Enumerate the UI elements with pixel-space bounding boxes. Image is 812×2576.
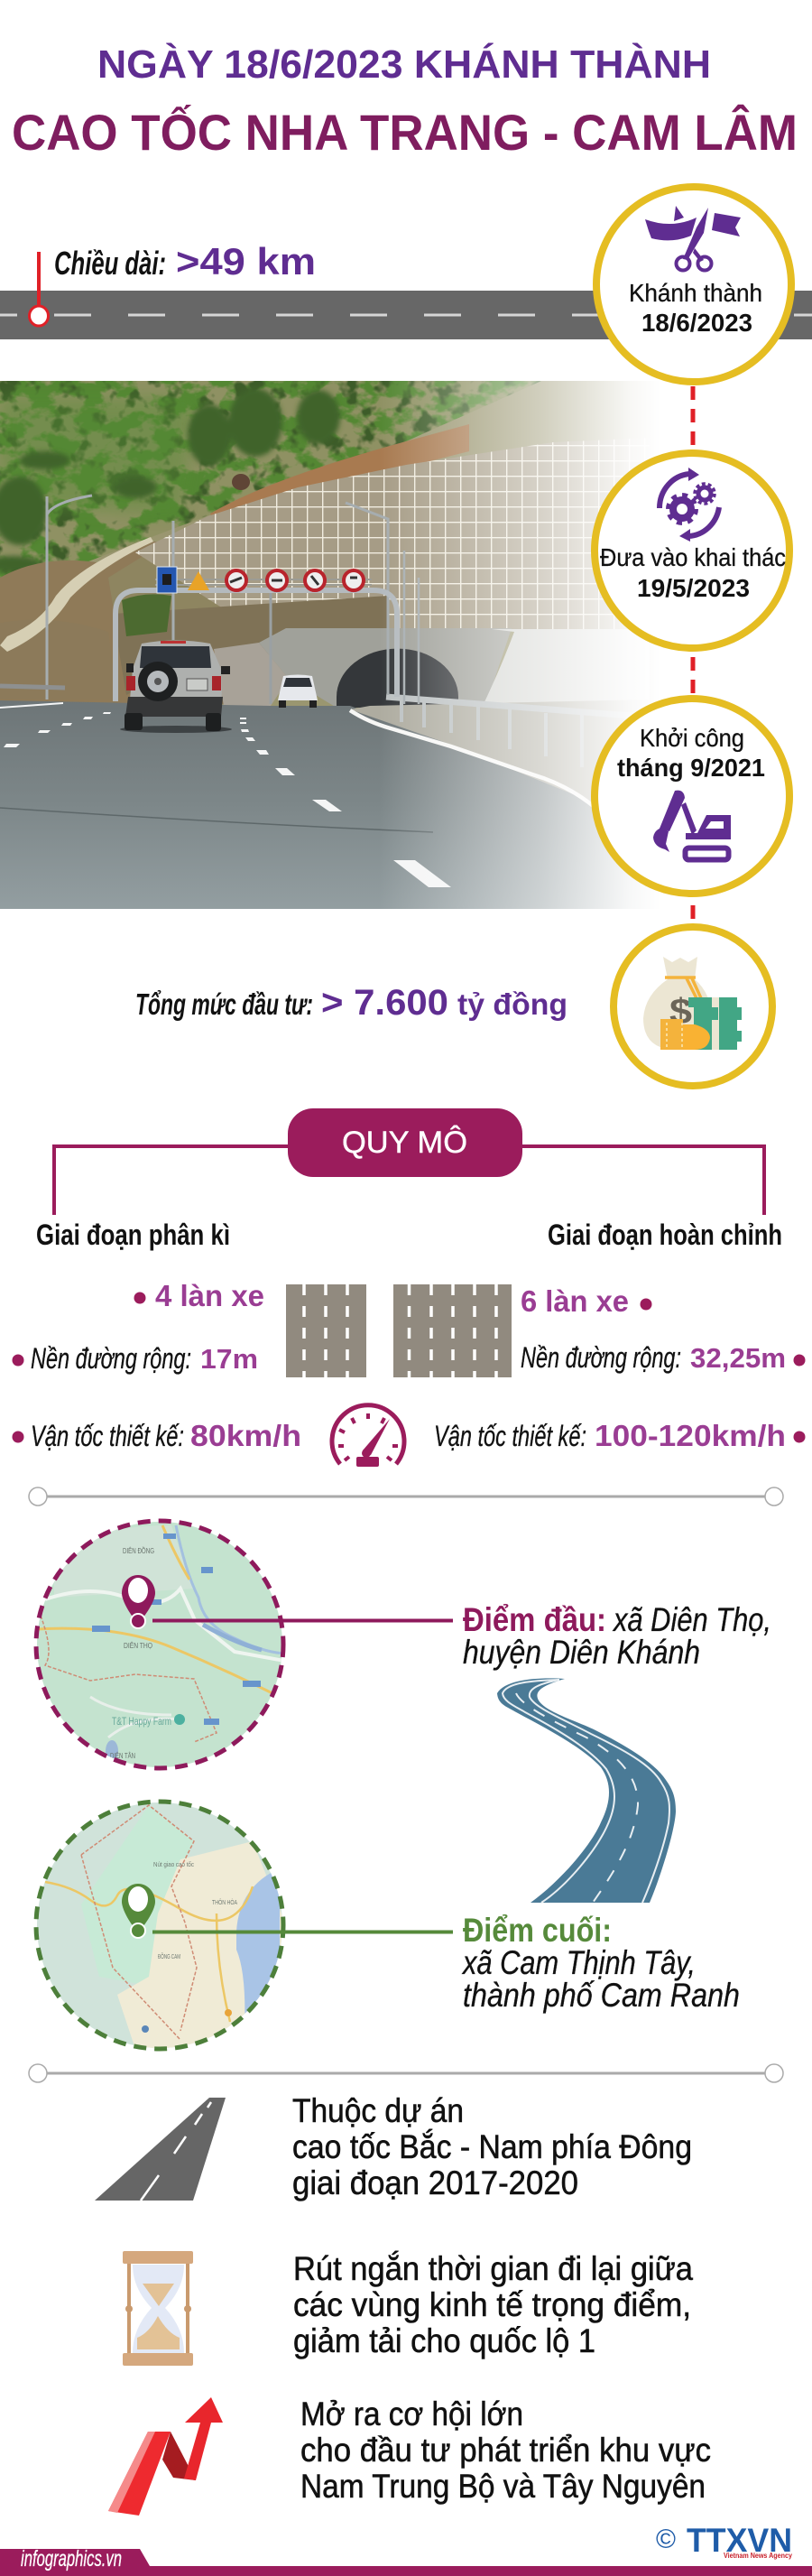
milestone: đưa vào khai thác: 19/5/2023 xyxy=(637,574,750,602)
map: start point xyxy=(36,1520,285,1769)
text: rút ngắn thời gian: các vùng kinh tế trọng điểm, xyxy=(293,2286,691,2323)
logo: TTXVN: © xyxy=(656,2525,676,2554)
road width: phase 1: Nền đường rộng: xyxy=(31,1342,191,1375)
icon: money bag: $ xyxy=(669,992,692,1032)
icon: ribbon and scissors xyxy=(645,206,741,271)
milestone: đưa vào khai thác: Đưa vào khai thác xyxy=(600,543,786,571)
icon: excavator xyxy=(653,791,731,859)
text: mở ra cơ hội: Mở ra cơ hội lớn xyxy=(300,2395,523,2432)
design speed: complete: 100-120km/h xyxy=(595,1419,786,1452)
text: rút ngắn thời gian: Rút ngắn thời gian đi lại giữa xyxy=(293,2250,693,2287)
text: rút ngắn thời gian xyxy=(293,2250,693,2359)
bracket lines xyxy=(54,1146,764,1215)
map: end point: ĐỒNG CAM xyxy=(158,1951,180,1960)
icon: hourglass xyxy=(123,2251,193,2366)
divider xyxy=(29,1487,783,1506)
milestone: khởi công: Khởi công xyxy=(640,724,744,752)
footer bar: infographics.vn xyxy=(21,2546,122,2571)
total investment text: tỷ đồng xyxy=(457,987,567,1021)
road width: complete: 32,25m xyxy=(690,1342,786,1374)
start point text: huyện Diên Khánh xyxy=(463,1634,700,1671)
milestone: khởi công: tháng 9/2021 xyxy=(617,754,765,782)
map: end point xyxy=(36,1801,285,2050)
text: thuộc dự án: cao tốc Bắc - Nam phía Đông xyxy=(292,2128,692,2165)
dashed timeline connector xyxy=(691,386,695,930)
length label: >49 km xyxy=(176,240,316,283)
milestone: khởi công xyxy=(595,699,789,894)
small white car xyxy=(278,675,318,708)
map: start point: T&T Happy Farm xyxy=(112,1715,171,1728)
winding road illustration xyxy=(497,1678,676,1903)
map: end point: Nút giao cao tốc xyxy=(153,1860,194,1868)
6 lanes label: 6 làn xe xyxy=(521,1284,629,1318)
heading pill: quy mô: QUY MÔ xyxy=(342,1126,467,1160)
heading pill: quy mô xyxy=(288,1108,522,1177)
logo: TTXVN: TTXVN xyxy=(687,2522,792,2559)
SUV xyxy=(120,641,232,733)
map: start point: DIÊN TÂN xyxy=(110,1752,135,1760)
text: mở ra cơ hội: Nam Trung Bộ và Tây Nguyên xyxy=(300,2468,706,2505)
milestone: khánh thành xyxy=(596,187,791,382)
milestone: khánh thành: Khánh thành xyxy=(629,279,762,307)
lamp posts and gantry xyxy=(47,496,419,704)
map: start point: DIÊN ĐỒNG xyxy=(123,1546,154,1555)
text: mở ra cơ hội: cho đầu tư phát triển khu vực xyxy=(300,2432,711,2469)
design speed: phase 1: Vận tốc thiết kế: xyxy=(31,1420,184,1452)
milestone: khánh thành: 18/6/2023 xyxy=(641,309,752,337)
icon: rising arrow xyxy=(108,2397,223,2516)
icon: speedometer xyxy=(332,1405,404,1467)
start point pin and leader xyxy=(122,1575,453,1628)
design speed: complete: Vận tốc thiết kế: xyxy=(434,1420,586,1452)
road width: phase 1: 17m xyxy=(200,1343,258,1375)
milestone: đưa vào khai thác xyxy=(595,453,789,648)
total investment text xyxy=(135,983,567,1023)
text: thuộc dự án: giai đoạn 2017-2020 xyxy=(292,2164,578,2201)
end point pin and leader xyxy=(122,1884,453,1938)
road width: complete: Nền đường rộng: xyxy=(521,1341,681,1374)
text: thuộc dự án: Thuộc dự án xyxy=(292,2092,464,2129)
lane diagram: 6 lanes xyxy=(393,1284,512,1377)
investment icon circle xyxy=(614,927,772,1086)
text: mở ra cơ hội xyxy=(300,2395,711,2505)
icon: road xyxy=(95,2098,226,2201)
traffic signs xyxy=(157,567,364,593)
hero photo: tunnel and expressway xyxy=(0,381,635,909)
total investment text: Tổng mức đầu tư: xyxy=(135,987,313,1021)
text: thuộc dự án xyxy=(292,2092,692,2201)
end point text: xã Cam Thịnh Tây, xyxy=(461,1944,696,1981)
4 lanes label: 4 làn xe xyxy=(155,1279,264,1312)
road strip with length marker xyxy=(0,252,812,339)
text: rút ngắn thời gian: giảm tải cho quốc lộ 1 xyxy=(293,2322,595,2359)
hillside trees xyxy=(0,388,340,572)
design speed: phase 1 xyxy=(13,1419,301,1452)
end point text: Điểm cuối: xyxy=(463,1912,612,1949)
length label xyxy=(54,240,316,283)
icon: gears xyxy=(660,468,719,542)
phase heading: phân kì: Giai đoạn phân kì xyxy=(36,1219,230,1251)
design speed: phase 1: 80km/h xyxy=(190,1419,301,1452)
start point text: xã Diên Thọ, xyxy=(612,1601,771,1638)
divider xyxy=(29,2064,783,2082)
title line 1: NGÀY 18/6/2023 KHÁNH THÀNH xyxy=(97,42,711,87)
start point text xyxy=(463,1601,771,1671)
logo: TTXVN: Vietnam News Agency xyxy=(724,2552,792,2560)
total investment text: > 7.600 xyxy=(321,983,448,1023)
design speed: complete xyxy=(434,1419,805,1452)
map: start point: DIÊN THỌ xyxy=(124,1642,152,1650)
left guardrail xyxy=(0,686,65,688)
footer bar xyxy=(0,2546,812,2576)
end point text xyxy=(461,1912,740,2014)
start point text: Điểm đầu: xyxy=(463,1601,606,1638)
lane diagram: 4 lanes xyxy=(286,1284,366,1377)
icon: money bag xyxy=(643,957,742,1050)
length label: Chiều dài: xyxy=(54,245,166,282)
map: end point: THÔN HÒA xyxy=(212,1898,237,1906)
end point text: thành phố Cam Ranh xyxy=(463,1977,740,2014)
